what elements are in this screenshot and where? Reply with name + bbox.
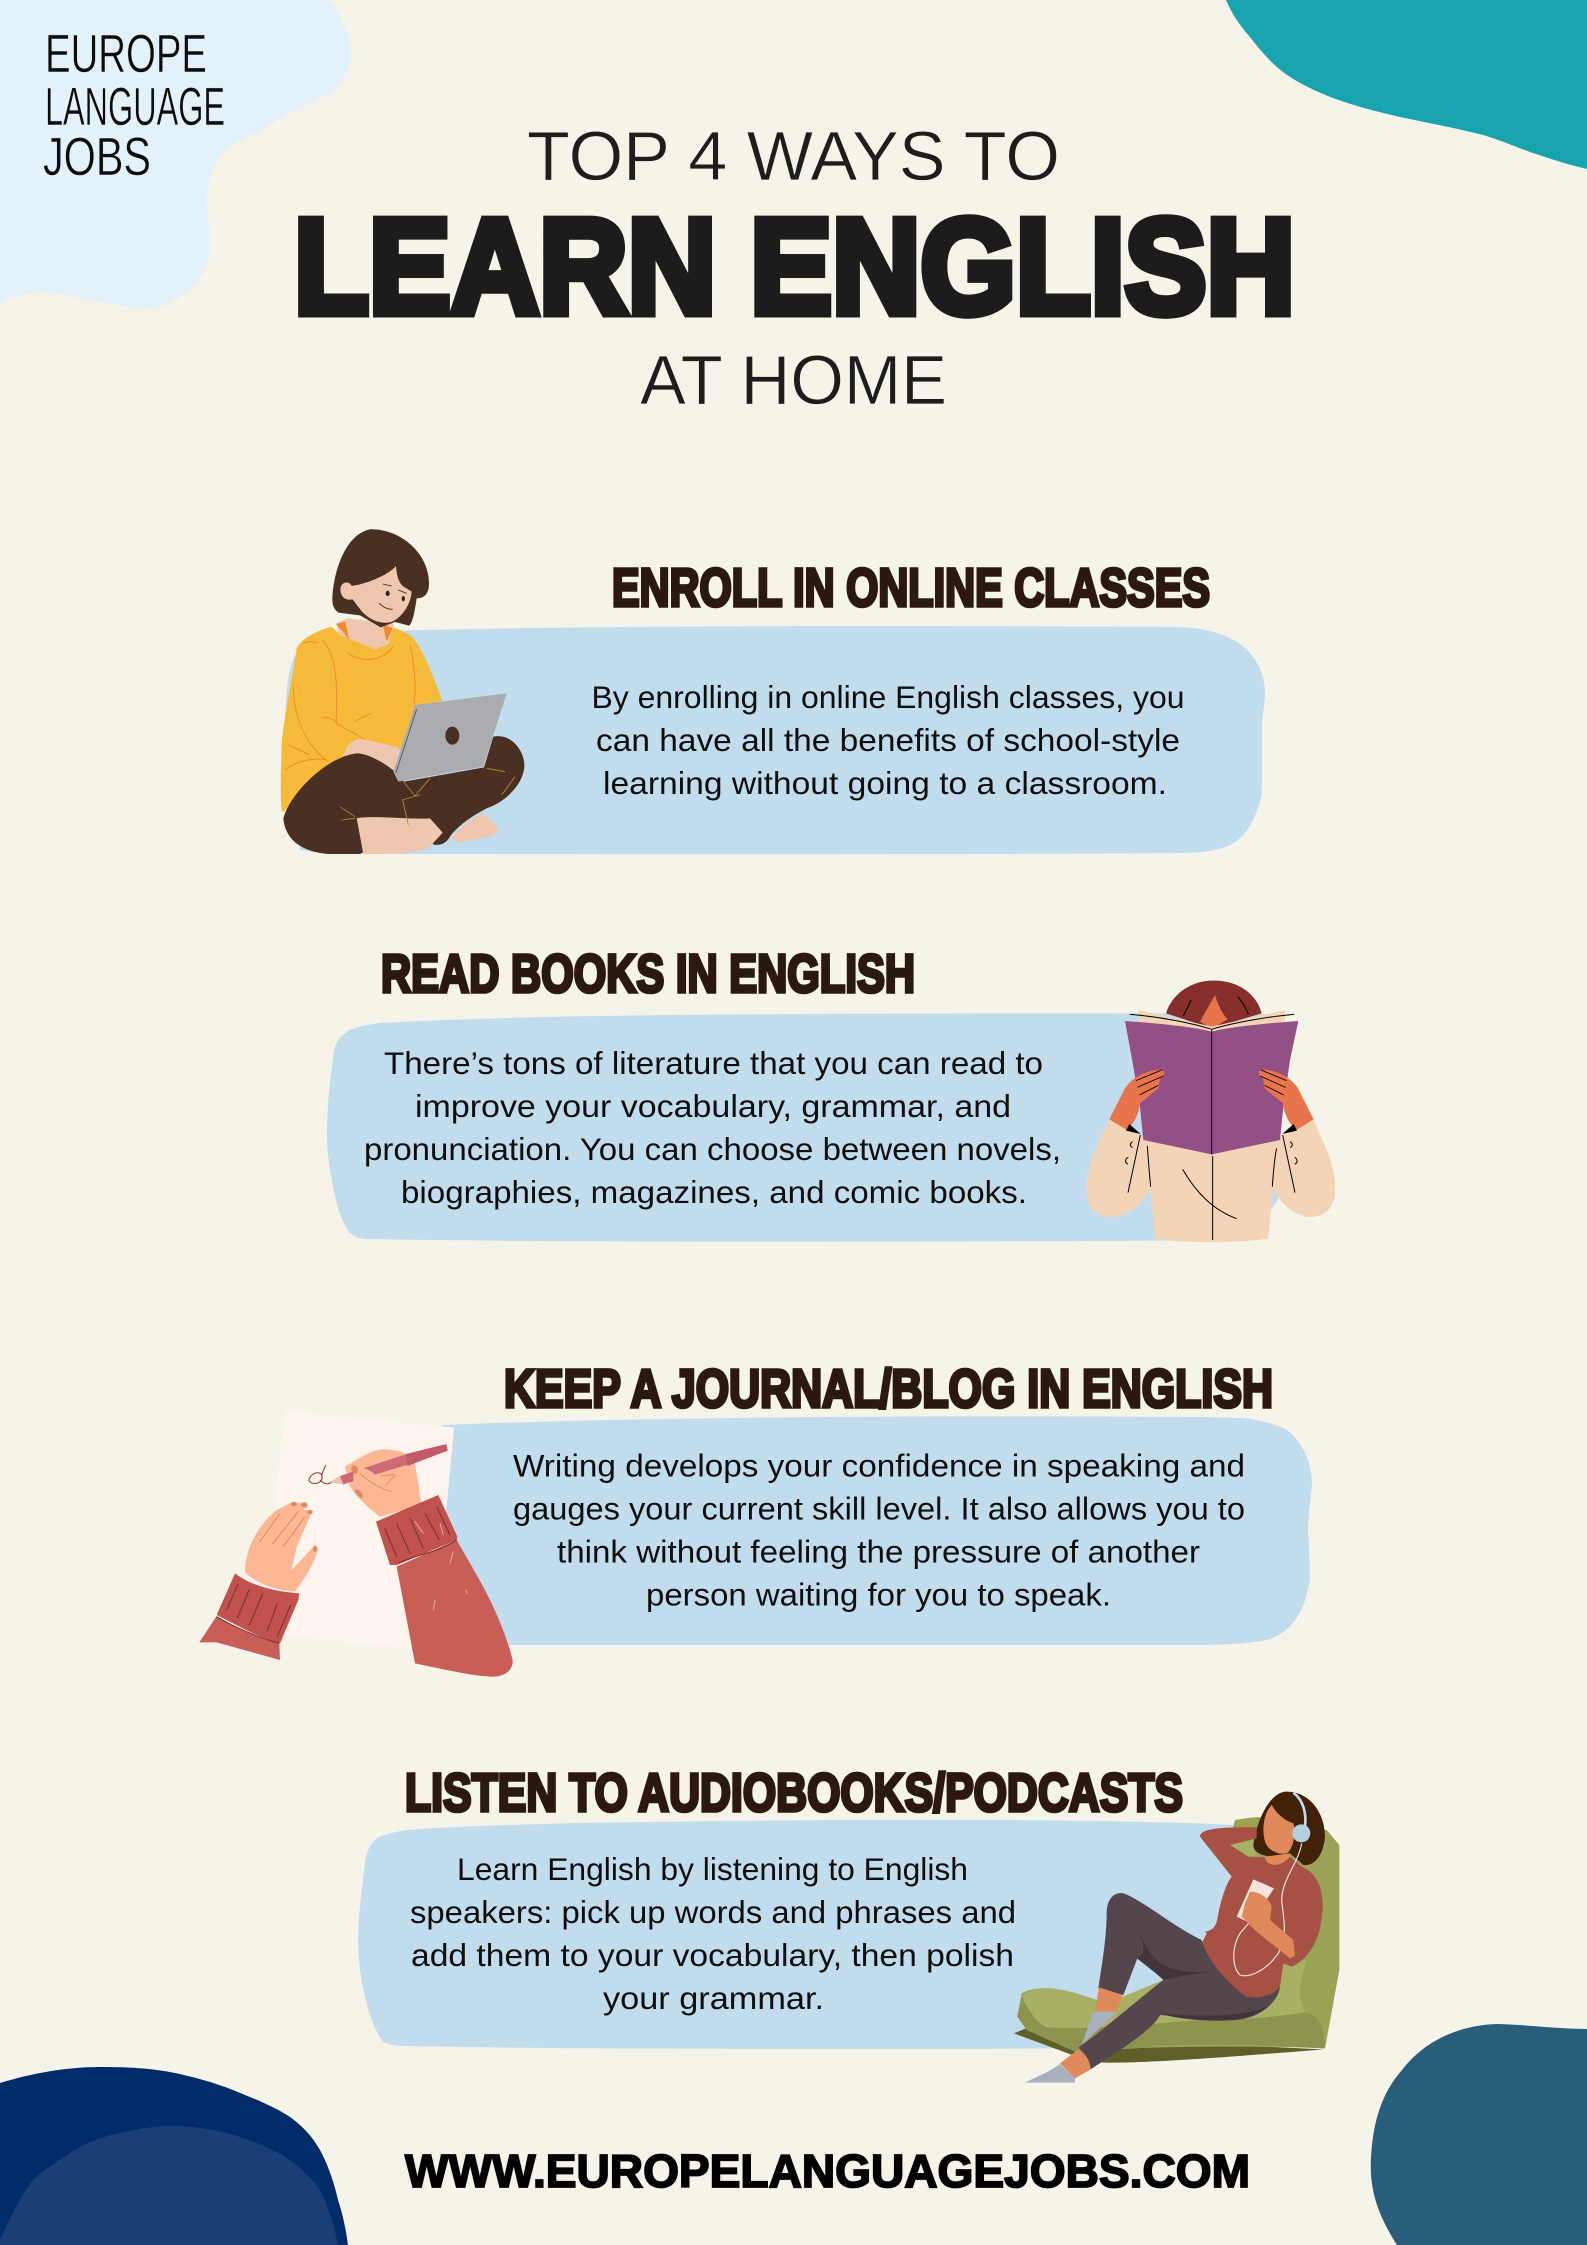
blob: bottom-right teal blue [1371,2024,1587,2245]
panel: listen to audiobooks [358,1763,1339,2083]
panel: read books in English [327,944,1335,1242]
blob: top-right teal [1226,0,1587,169]
logo: Europe Language Jobs [43,24,225,187]
panel background 3 [420,1416,1312,1645]
body text: person waiting for you to speak. [646,1576,1111,1612]
body text: think without feeling the pressure of another [557,1534,1200,1570]
body text: can have all the benefits of school-style [596,722,1180,758]
heading: ENROLL IN ONLINE CLASSES [612,558,1210,618]
illustration: girl with laptop [281,529,524,854]
illustration: woman listening on a cushion [1014,1792,1339,2083]
blob: top-left light blue [0,0,351,308]
body text [592,679,1184,801]
body text: biographies, magazines, and comic books. [401,1174,1027,1210]
heading: LISTEN TO AUDIOBOOKS/PODCASTS [405,1763,1183,1823]
title: AT HOME [640,341,947,419]
body text [513,1448,1245,1612]
illustration: hands writing on paper [199,1411,513,1677]
heading: KEEP A JOURNAL/BLOG IN ENGLISH [504,1359,1273,1419]
panel background 2 [327,1013,1280,1242]
logo: Europe Language Jobs: LANGUAGE [45,77,225,137]
website url: WWW.EUROPELANGUAGEJOBS.COM [405,2145,1250,2197]
title: TOP 4 WAYS TO [527,117,1060,195]
illustration: person reading a book [1087,981,1335,1242]
panel: enroll in online classes [281,529,1265,854]
panel: keep a journal or blog [199,1359,1312,1677]
body text: pronunciation. You can choose between novels, [364,1131,1061,1167]
heading: READ BOOKS IN ENGLISH [381,944,915,1004]
body text: speakers: pick up words and phrases and [410,1894,1016,1930]
body text: There’s tons of literature that you can read to [384,1045,1043,1081]
body text: By enrolling in online English classes, you [592,679,1184,715]
body text [364,1045,1061,1210]
body text: Writing develops your confidence in speaking and [513,1448,1245,1484]
panel background 4 [358,1820,1236,2049]
logo: Europe Language Jobs: JOBS [43,127,151,187]
title [294,117,1295,419]
logo: Europe Language Jobs: EUROPE [45,24,207,84]
body text: add them to your vocabulary, then polish [411,1937,1014,1973]
body text: your grammar. [603,1980,824,2016]
body text: gauges your current skill level. It also allows you to [513,1490,1245,1526]
body text: learning without going to a classroom. [603,765,1167,801]
title: LEARN ENGLISH [294,191,1295,342]
blob: bottom-left navy [0,2067,348,2245]
body text [410,1851,1016,2016]
body text: Learn English by listening to English [457,1851,968,1887]
blob: bottom-left inner [0,2126,338,2245]
panel background 1 [284,626,1265,854]
body text: improve your vocabulary, grammar, and [415,1088,1011,1124]
